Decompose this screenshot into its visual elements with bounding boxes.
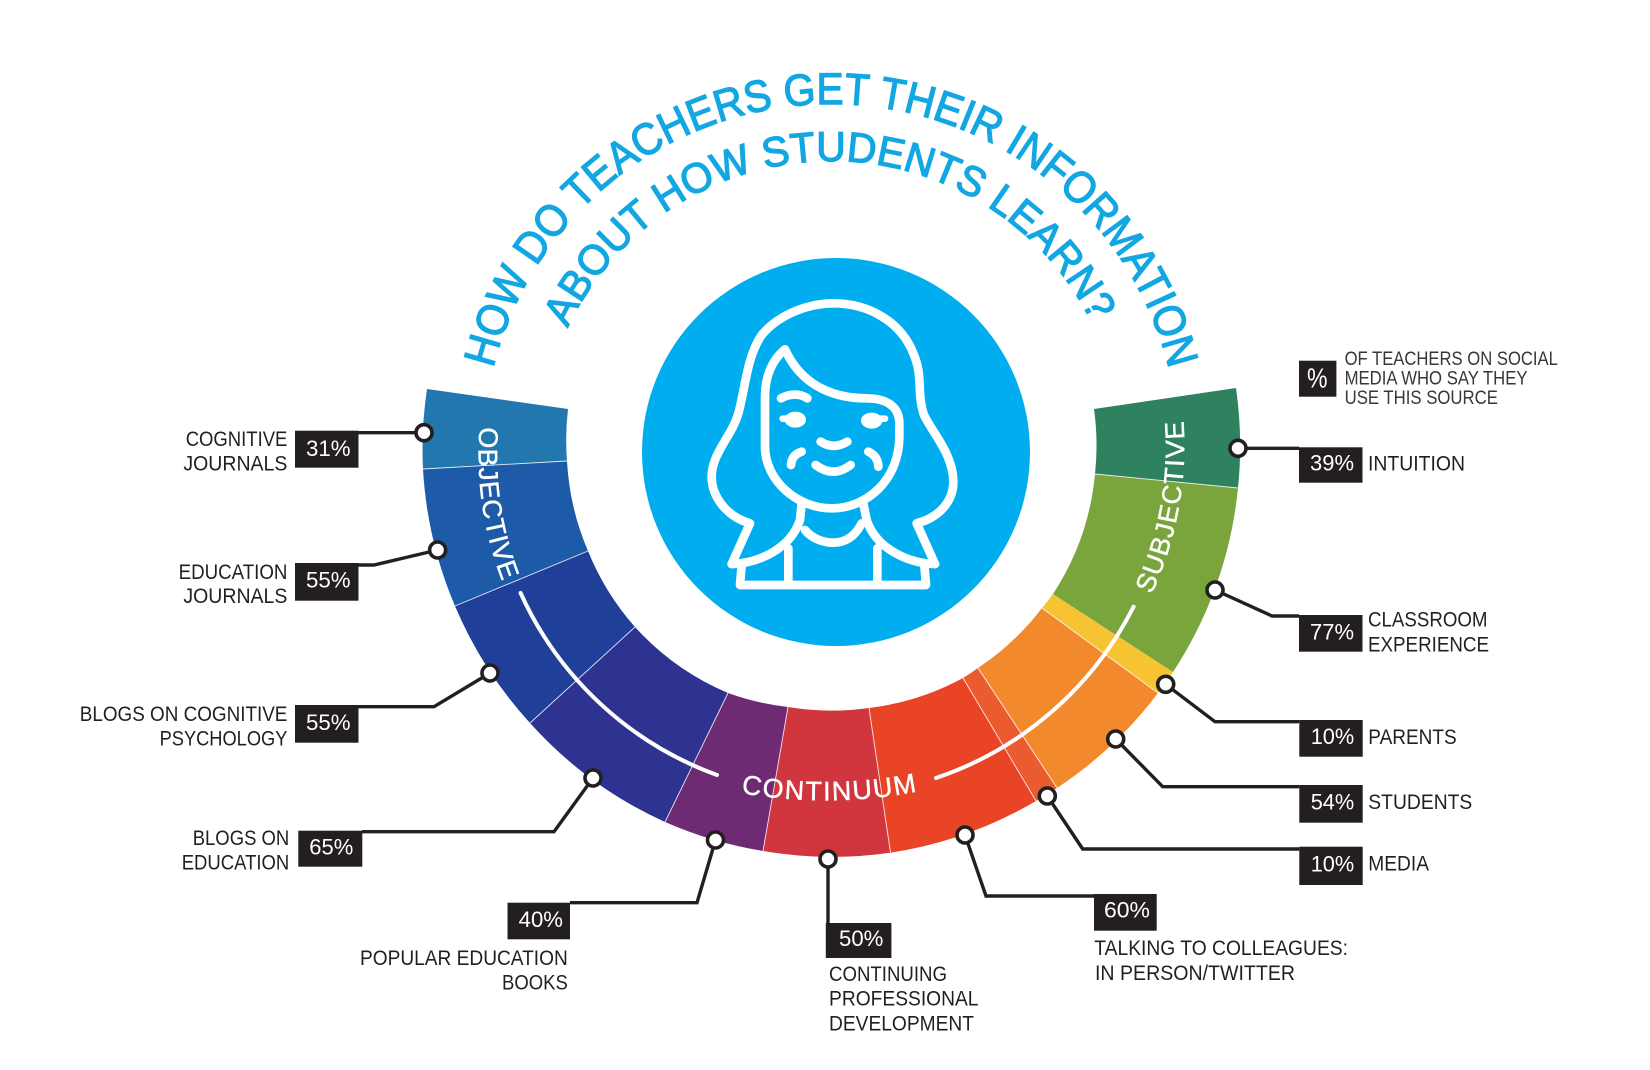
- callout: classroom experience: [1207, 582, 1489, 657]
- callout: education journals: EDUCATION: [179, 561, 287, 584]
- callout: continuing professional development: CONTINUING: [829, 963, 947, 986]
- callout: blogs on education: [182, 770, 601, 874]
- segment: intuition: [1094, 388, 1240, 488]
- label: objective: OBJECTIVE: [478, 428, 520, 580]
- callout: students: 54%: [1311, 789, 1354, 814]
- callout: cognitive journals: 31%: [306, 436, 351, 461]
- title: HOW DO TEACHERS GET THEIR INFORMATION: [464, 72, 1199, 367]
- label: subjective: SUBJECTIVE: [1136, 422, 1185, 592]
- legend: %: [1307, 363, 1328, 394]
- callout: talking to colleagues: 60%: [1104, 897, 1150, 922]
- callout: popular education books: BOOKS: [502, 971, 568, 994]
- icon: teacher: [712, 303, 953, 585]
- callout: blogs on education: BLOGS ON: [193, 827, 289, 850]
- callout: students: [1108, 731, 1472, 823]
- segment: parents: [1042, 594, 1173, 693]
- callout: parents: PARENTS: [1368, 726, 1457, 749]
- segment: cognitive journals: [423, 389, 568, 469]
- callout: classroom experience: EXPERIENCE: [1368, 634, 1489, 657]
- segment: continuing professional development: [763, 707, 890, 857]
- callout: classroom experience: CLASSROOM: [1368, 609, 1488, 632]
- callout: continuing professional development: PROFESSIONAL: [829, 988, 978, 1011]
- legend: OF TEACHERS ON SOCIAL: [1345, 349, 1558, 370]
- callout: parents: 10%: [1311, 724, 1354, 749]
- segment: talking to colleagues: [869, 678, 1036, 853]
- callout: education journals: JOURNALS: [183, 585, 287, 608]
- callout: cognitive journals: COGNITIVE: [186, 428, 287, 451]
- callout: continuing professional development: DEVELOPMENT: [829, 1013, 974, 1036]
- segment: blogs on education: [530, 627, 728, 822]
- segment: media: [963, 668, 1057, 801]
- callout: popular education books: 40%: [519, 907, 563, 932]
- segment: classroom experience: [1053, 474, 1238, 672]
- segment: students: [978, 608, 1158, 788]
- callout: popular education books: [360, 832, 724, 994]
- callout: blogs on cognitive psychology: 55%: [306, 710, 351, 735]
- callout: blogs on cognitive psychology: PSYCHOLOGY: [160, 728, 287, 751]
- label: continuum: CONTINUUM: [743, 774, 916, 801]
- callout: parents: [1158, 676, 1457, 757]
- callout: media: [1039, 788, 1429, 885]
- callout: blogs on education: EDUCATION: [182, 851, 289, 874]
- callout: continuing professional development: 50%: [839, 926, 883, 951]
- legend: MEDIA WHO SAY THEY: [1345, 368, 1528, 389]
- callout: blogs on education: 65%: [309, 834, 353, 859]
- segment: blogs on cognitive psychology: [455, 551, 635, 723]
- callout: continuing professional development: [820, 851, 978, 1036]
- callout: classroom experience: 77%: [1310, 619, 1354, 644]
- title: ABOUT HOW STUDENTS LEARN?: [546, 132, 1115, 329]
- callout: education journals: 55%: [306, 568, 351, 592]
- central blue circle with teacher icon: [642, 258, 1030, 646]
- callout: education journals: [179, 542, 446, 608]
- callout: students: STUDENTS: [1368, 791, 1472, 814]
- callout: intuition: INTUITION: [1368, 453, 1465, 476]
- segment: education journals: [423, 461, 588, 606]
- continuum arrows: [521, 593, 1134, 778]
- callout: talking to colleagues: IN PERSON/TWITTER: [1095, 962, 1295, 985]
- callout: talking to colleagues: TALKING TO COLLEAGUES:: [1094, 937, 1348, 960]
- callout: media: 10%: [1311, 852, 1354, 877]
- callout: cognitive journals: JOURNALS: [183, 453, 287, 476]
- callout: blogs on cognitive psychology: [80, 665, 498, 751]
- continuum ring: [423, 388, 1240, 857]
- callout: media: MEDIA: [1368, 853, 1429, 876]
- callout: blogs on cognitive psychology: BLOGS ON COGNITIVE: [80, 703, 287, 726]
- callout: popular education books: POPULAR EDUCATION: [360, 947, 568, 970]
- legend: [1299, 349, 1558, 409]
- segment: popular education books: [665, 693, 788, 851]
- callout: talking to colleagues: [957, 827, 1348, 985]
- callout: cognitive journals: [183, 425, 432, 476]
- callout: intuition: 39%: [1310, 451, 1354, 476]
- legend: USE THIS SOURCE: [1345, 388, 1498, 409]
- callout: intuition: [1230, 440, 1465, 483]
